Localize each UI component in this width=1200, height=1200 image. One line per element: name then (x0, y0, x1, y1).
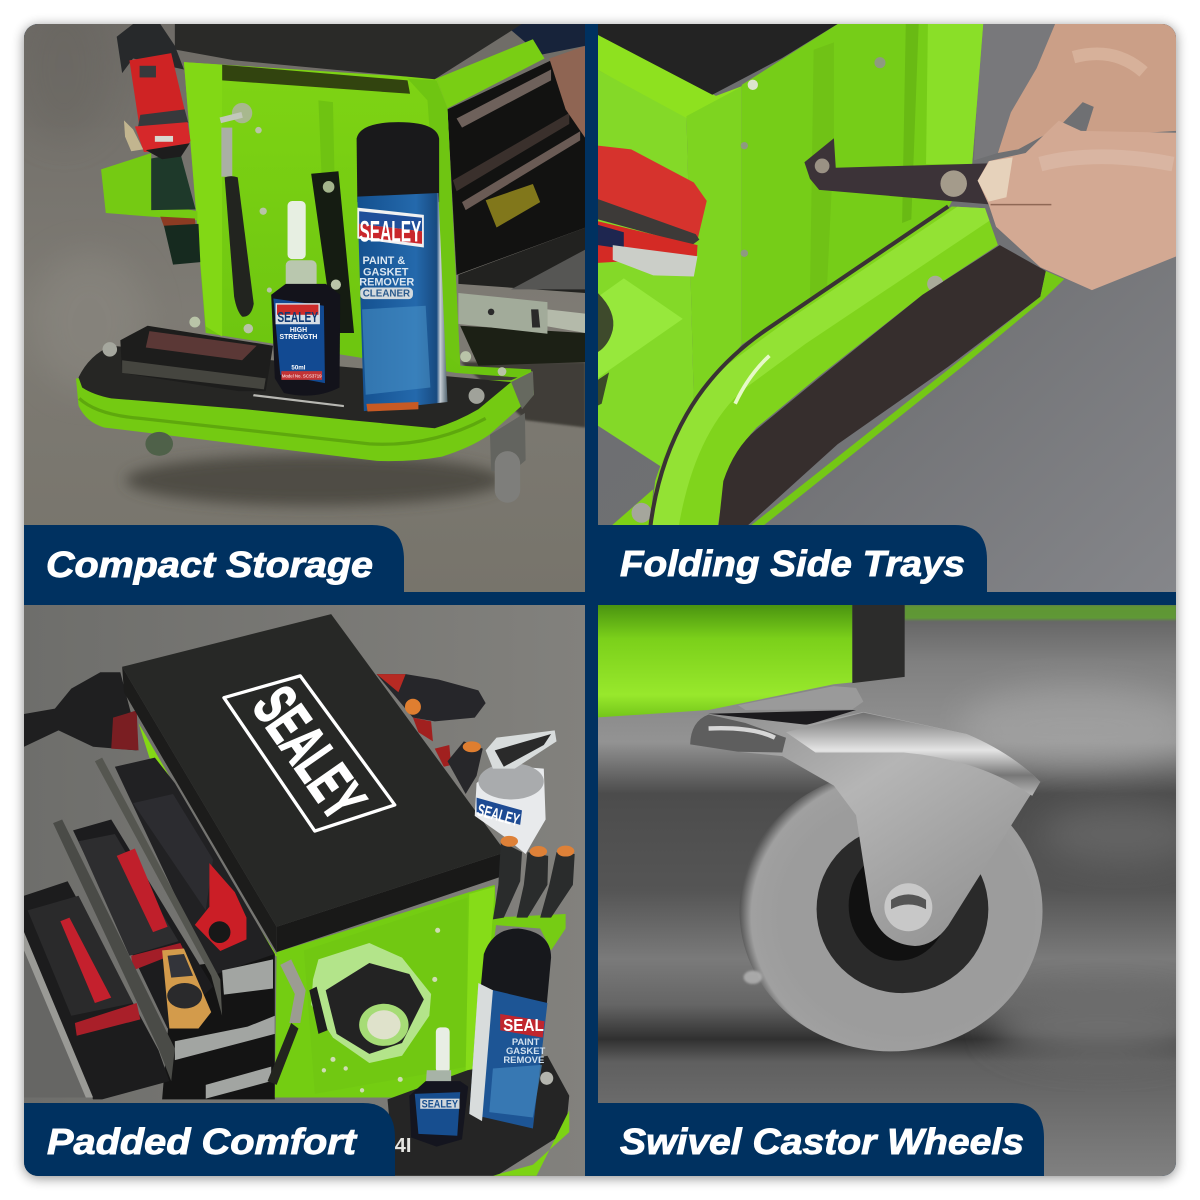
thread lock bottle: 50ml (291, 364, 306, 371)
trolley side panel (741, 24, 983, 345)
panel: swivel castor wheels photo (598, 605, 1200, 1176)
spray can: PAINT (512, 1037, 540, 1048)
panel: folding side trays photo (598, 24, 1177, 593)
drill right (377, 674, 486, 767)
label tab: Padded Comfort: Padded Comfort (47, 1121, 358, 1162)
label tab: Swivel Castor Wheels (585, 1103, 1044, 1176)
drill holder bracket (101, 153, 197, 220)
label tab: Compact Storage: Compact Storage (46, 544, 373, 585)
divider: vertical (585, 24, 598, 1176)
drill handle (151, 153, 200, 265)
wheel (740, 771, 1043, 1051)
drill battery (598, 146, 707, 276)
lower green edge (742, 271, 1064, 533)
spray can: SEAL (503, 1015, 544, 1035)
corner post (852, 605, 905, 683)
tool drawers (24, 758, 275, 1099)
spray can: PAINT & (362, 255, 405, 267)
top plate (709, 686, 863, 725)
multimeter (162, 949, 211, 1028)
thread lock bottle (271, 201, 340, 396)
dark side panel (718, 245, 1046, 533)
spray can: REMOVE (503, 1055, 544, 1066)
drawer slide (458, 293, 586, 334)
work light (309, 943, 431, 1063)
screws (189, 127, 506, 376)
footrest (388, 1056, 569, 1176)
drawers (447, 46, 586, 366)
hand and sleeve (512, 24, 585, 138)
spray can: CLEANER (363, 289, 410, 300)
chrome castor fork (690, 712, 1040, 946)
seat pad (175, 24, 522, 79)
strap (804, 138, 992, 205)
spray can: GASKET (363, 267, 409, 279)
screws on body (322, 928, 440, 1092)
label tab: Folding Side Trays (585, 525, 987, 592)
magnetic pick-up tool (220, 103, 254, 317)
seat pad (122, 614, 506, 952)
green trolley base (598, 605, 852, 717)
label tab: Folding Side Trays: Folding Side Trays (620, 543, 965, 584)
drawer slides (175, 959, 275, 1099)
label tab: Padded Comfort (24, 1103, 395, 1176)
aerosol can with trigger: SEALEY (475, 800, 522, 830)
footrest: 4I (395, 1135, 411, 1157)
hanging tool (268, 959, 306, 1085)
spray can: REMOVER (359, 277, 414, 289)
footrest tray (76, 342, 534, 461)
divider: horizontal (24, 592, 1176, 605)
label tab: Compact Storage (24, 525, 404, 592)
drill body (117, 24, 190, 159)
green curved tube (612, 204, 998, 525)
spray can: SEALEY (360, 215, 421, 248)
castors (145, 413, 526, 503)
thread lock bottle: HIGH (290, 327, 307, 334)
panel: compact storage photo (17, 0, 586, 593)
seat pad: SEALEY (239, 675, 378, 832)
thread lock bottle: STRENGTH (279, 334, 317, 341)
green trolley frame (184, 39, 545, 378)
seat pad corner (598, 24, 838, 95)
impact drill left (24, 672, 139, 750)
hands (978, 24, 1177, 290)
spray can: GASKET (506, 1046, 546, 1057)
green left edge of body (139, 723, 278, 958)
thread lock bottle: SEALEY (422, 1098, 459, 1110)
thread lock bottle: SEALEY (277, 310, 318, 326)
floor speck (744, 971, 762, 984)
red mallet (195, 863, 246, 951)
velcro strap (311, 171, 354, 333)
spray can (469, 929, 551, 1128)
thread lock bottle: Model No. SCS3719 (282, 374, 322, 379)
green side body (275, 885, 566, 1098)
screwdrivers (493, 836, 575, 919)
trolley left panel (598, 33, 745, 466)
spray can (357, 122, 447, 411)
aerosol can with trigger (475, 730, 557, 854)
thread lock bottle (409, 1027, 468, 1147)
screwdriver behind can (447, 741, 483, 794)
panel: padded comfort photo (24, 605, 586, 1178)
label tab: Swivel Castor Wheels: Swivel Castor Wheels (620, 1121, 1024, 1162)
bit set (120, 326, 273, 391)
